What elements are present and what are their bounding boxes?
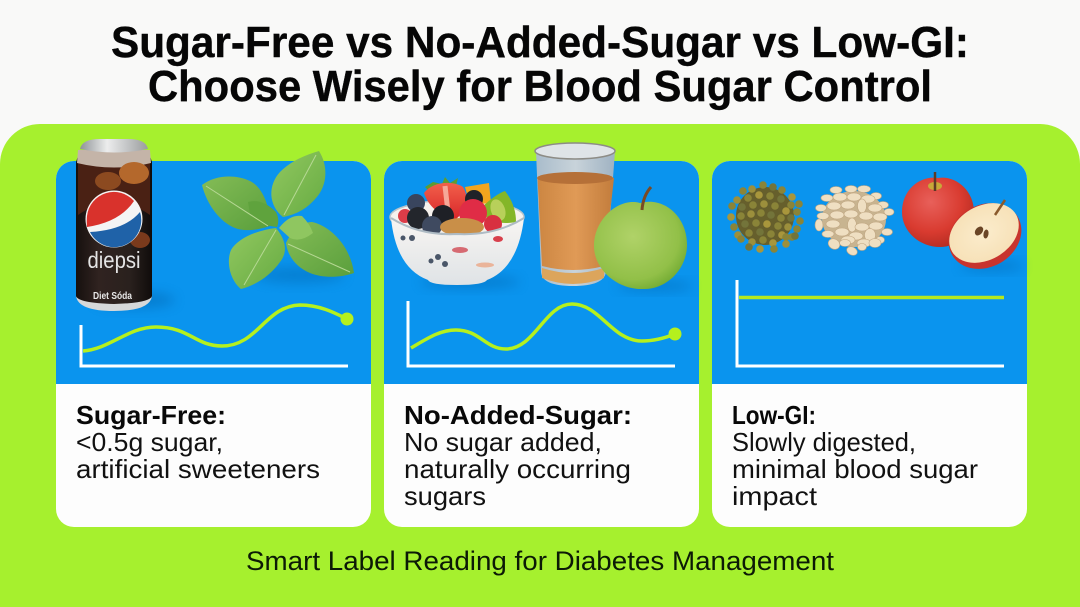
label: no-added-sugar text: naturally occurring: [404, 454, 631, 484]
panel: sugar-free: [56, 139, 371, 527]
green background panel: [0, 124, 1080, 607]
icon: red apple with slice: [902, 172, 1033, 282]
label: sugar-free text: <0.5g sugar,: [76, 427, 223, 457]
label: sugar-free text: Sugar-Free:: [76, 400, 226, 430]
title: Sugar-Free vs No-Added-Sugar vs Low-GI:: [111, 18, 969, 67]
blue image area: [56, 161, 371, 384]
icon: green apple: [594, 187, 693, 291]
label: low-gi text: [732, 400, 978, 511]
pepsi-style logo: [86, 190, 142, 248]
card background: [384, 161, 699, 527]
icon: diet soda can: diepsi: [88, 247, 140, 273]
blue image area: [712, 161, 1027, 384]
label: no-added-sugar text: sugars: [404, 481, 486, 511]
blue image area: [384, 161, 699, 384]
icon: yogurt fruit bowl: [390, 177, 524, 288]
label: low-gi text: minimal blood sugar: [732, 454, 978, 484]
icon: rolled oats: [815, 186, 894, 257]
label: low-gi text: Low-GI:: [732, 400, 816, 430]
card background: [56, 161, 371, 527]
label: sugar-free text: [76, 400, 320, 484]
chart: blood sugar moderate curve: [81, 305, 354, 366]
label: sugar-free text: artificial sweeteners: [76, 454, 320, 484]
label: no-added-sugar text: No sugar added,: [404, 427, 602, 457]
card background: [712, 161, 1027, 527]
label: low-gi text: impact: [732, 481, 818, 511]
icon: diet soda can: Diet Sóda: [93, 291, 132, 302]
title: Choose Wisely for Blood Sugar Control: [148, 62, 932, 111]
icon: diet soda can: [76, 139, 175, 311]
icon: mung beans: [727, 181, 804, 253]
label: no-added-sugar text: No-Added-Sugar:: [404, 400, 632, 430]
panel: no-added-sugar: [384, 143, 699, 527]
bowl front: [391, 218, 524, 285]
title: [111, 18, 969, 111]
icon: apple juice glass: [535, 143, 615, 286]
chart: blood sugar spike curve: [408, 301, 682, 366]
panel: low-gi: [712, 161, 1033, 527]
icon: mint leaves: [202, 151, 354, 289]
label: no-added-sugar text: [404, 400, 632, 511]
label: low-gi text: Slowly digested,: [732, 427, 916, 457]
chart: flat blood sugar line: [737, 280, 1004, 366]
footer caption: Smart Label Reading for Diabetes Management: [246, 546, 835, 576]
